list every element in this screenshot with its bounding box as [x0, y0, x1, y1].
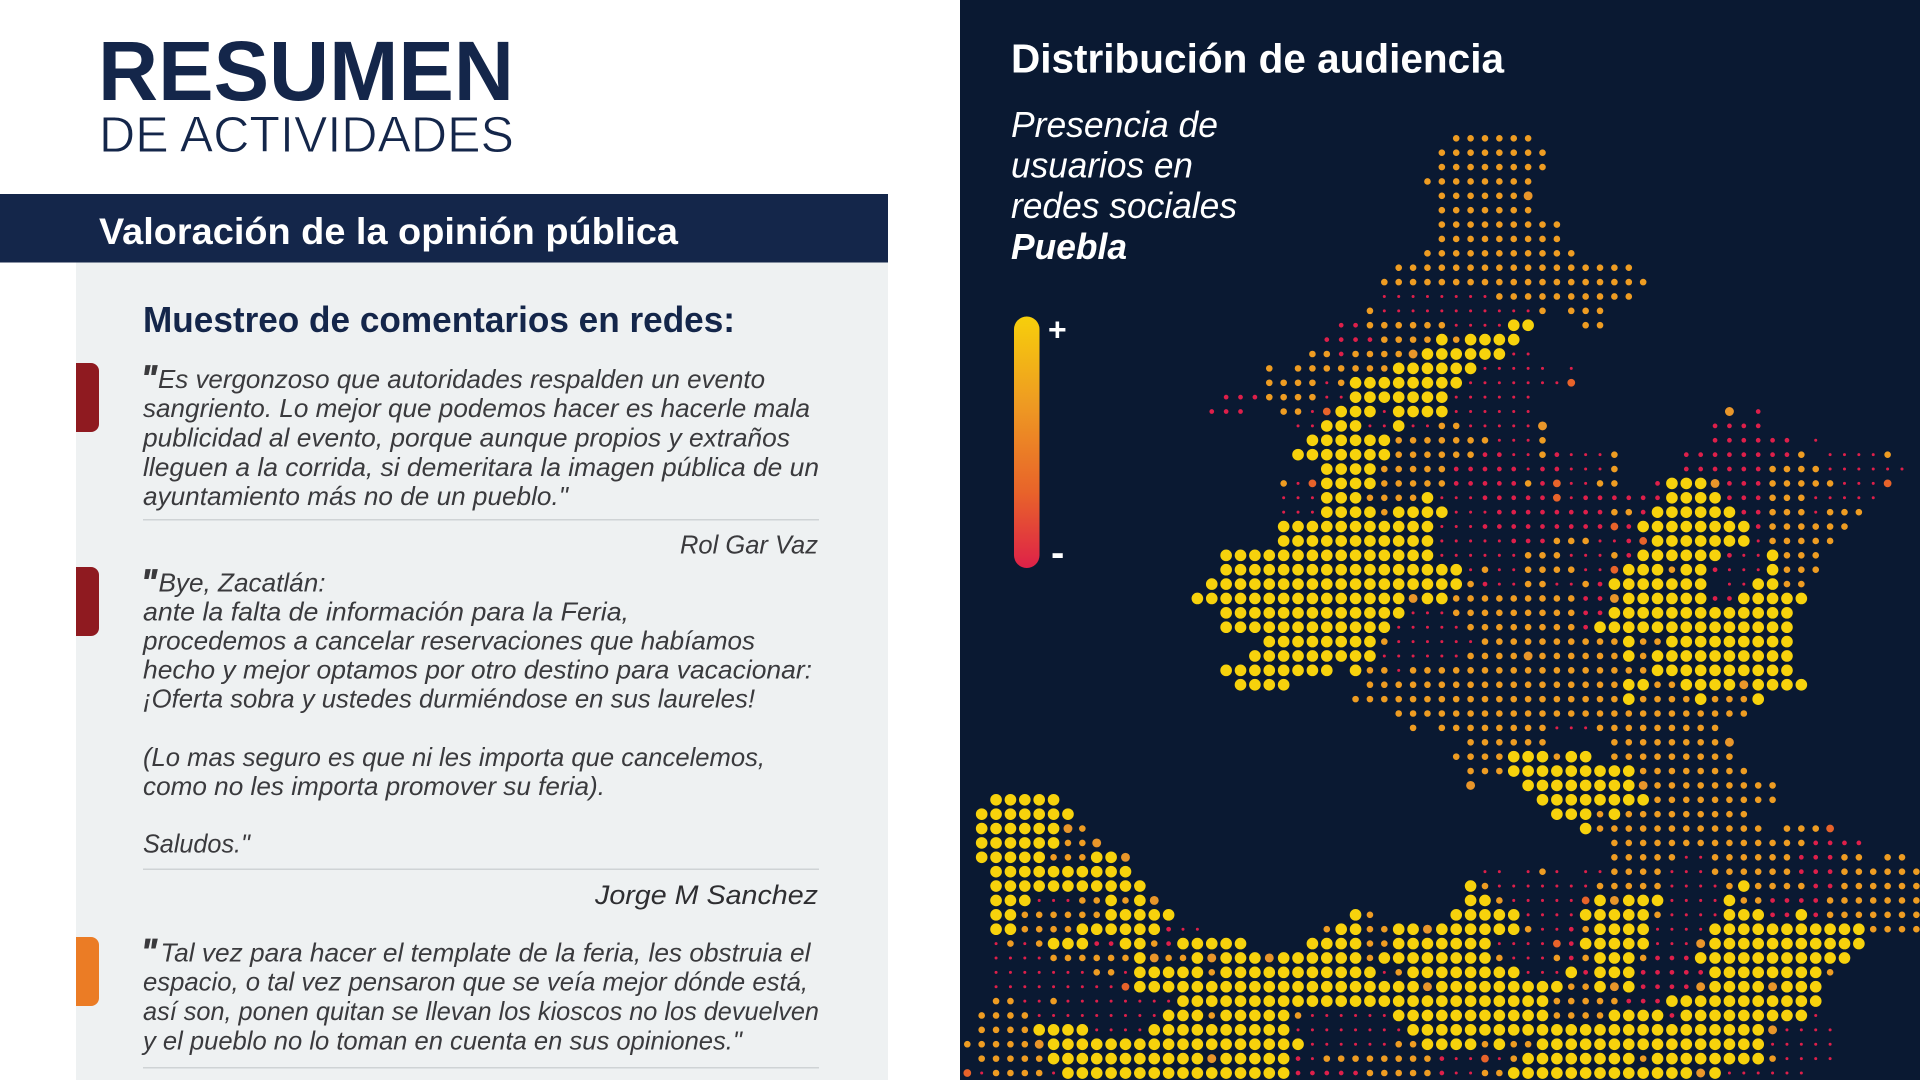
panel: comments background [76, 262, 888, 1080]
comment 2: Jorge M Sanchez [594, 880, 819, 910]
dots: lowest presence [982, 296, 1903, 1073]
comment 2: Saludos." [143, 829, 252, 859]
heading: comment sample: Muestreo de comentarios en redes: [143, 299, 735, 340]
comment 1: " [141, 358, 158, 398]
legend: colour scale: - [1051, 531, 1064, 575]
comment 3 [76, 931, 819, 1068]
title: DE ACTIVIDADES [99, 106, 514, 163]
comment 1 [76, 358, 819, 559]
dots: low presence [1097, 325, 1860, 1073]
map subtitle: redes sociales [1011, 185, 1237, 226]
dot map: Puebla audience presence [967, 138, 1918, 1073]
comment 1: sangriento. Lo mejor que podemos hacer es hacerle mala [143, 393, 810, 423]
dots: orange-red accents [967, 383, 1889, 1073]
comment 3: " [141, 931, 158, 972]
comment 2: ante la falta de información para la Feria, [143, 596, 629, 626]
heading banner: public opinion: Valoración de la opinión pública [99, 211, 678, 252]
map subtitle [1011, 104, 1237, 267]
comment 3: Tal vez para hacer el template de la feria, les obstruia el [160, 938, 812, 968]
map subtitle: Puebla [1011, 226, 1127, 267]
heading: audience distribution: Distribución de audiencia [1011, 36, 1505, 82]
comment 1: publicidad al evento, porque aunque propios y extraños [142, 422, 790, 452]
title [98, 24, 514, 163]
comment 2: como no les importa promover su feria). [143, 771, 605, 801]
legend: colour scale: + [1048, 312, 1067, 348]
heading banner: public opinion [0, 194, 888, 262]
comment 3: y el pueblo no lo toman en cuenta en sus opiniones." [141, 1025, 744, 1055]
dots: medium-high presence [1039, 196, 1774, 1073]
map subtitle: Presencia de [1011, 104, 1218, 145]
panel: audience distribution background [960, 0, 1920, 1080]
comment 1: ayuntamiento más no de un pueblo." [143, 481, 570, 511]
comment 2: " [141, 562, 158, 602]
dots: high presence [982, 325, 1860, 1073]
comment 2: (Lo mas seguro es que ni les importa que cancelemos, [143, 742, 765, 772]
comment 2: ¡Oferta sobra y ustedes durmiéndose en sus laureles! [143, 684, 755, 714]
comment 2: hecho y mejor optamos por otro destino para vacacionar: [143, 654, 812, 684]
comment 1: Es vergonzoso que autoridades respalden un evento [158, 364, 765, 394]
map subtitle: usuarios en [1011, 144, 1193, 185]
comment 1: Rol Gar Vaz [680, 529, 818, 559]
legend: colour scale [1014, 312, 1067, 575]
comment 1: lleguen a la corrida, si demeritara la imagen pública de un [143, 452, 819, 482]
title: RESUMEN [98, 24, 514, 118]
dots: medium presence [967, 138, 1918, 1073]
comment 2 [76, 562, 819, 910]
comment 3: así son, ponen quitan se llevan los kioscos no los devuelven [143, 996, 819, 1026]
comment 3: espacio, o tal vez pensaron que se veía mejor dónde está, [143, 967, 808, 997]
comment 2: Bye, Zacatlán: [158, 568, 326, 598]
comment 2: procedemos a cancelar reservaciones que habíamos [142, 626, 755, 656]
